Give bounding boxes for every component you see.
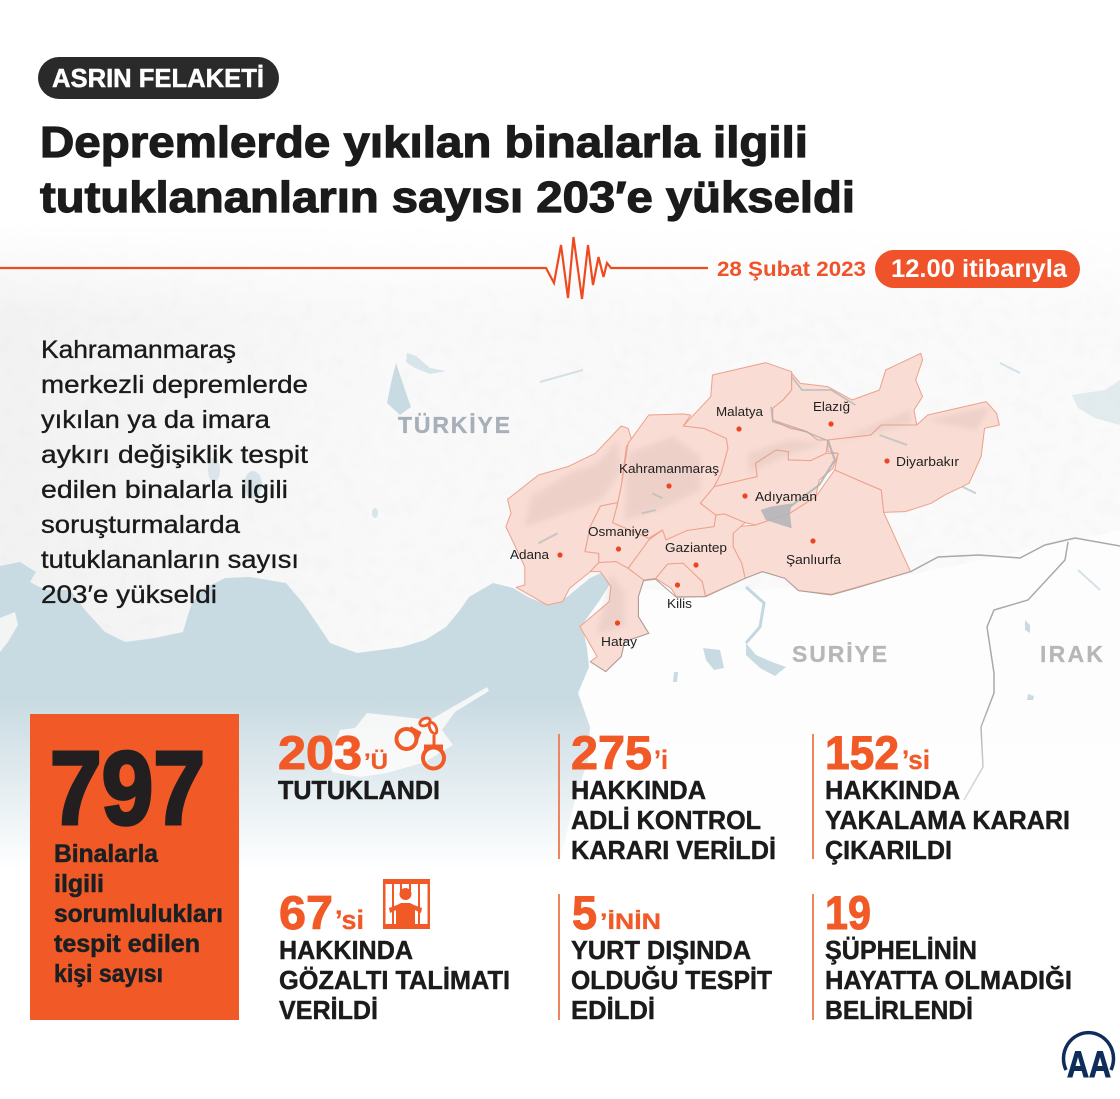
- province: Osmaniye: [585, 503, 663, 568]
- stat: 203: TUTUKLANDI: [278, 775, 440, 805]
- city labels: Hatay: [601, 634, 638, 649]
- stat: 203: ’Ü: [364, 749, 388, 774]
- province: Sanliurfa: [733, 470, 910, 594]
- country label: Irak: IRAK: [1040, 641, 1103, 667]
- caption: tespit edilen: [54, 930, 200, 958]
- stat: 275: HAKKINDA: [571, 775, 706, 805]
- stat: 19: BELİRLENDİ: [825, 995, 973, 1025]
- city labels: Diyarbakır: [896, 454, 960, 469]
- city labels: Osmaniye: [588, 524, 649, 539]
- divider: [812, 734, 814, 859]
- province: Hatay: [580, 562, 649, 672]
- stat: 5: 5: [572, 886, 597, 939]
- city labels: Adana: [510, 547, 550, 562]
- stat: 67: [279, 879, 510, 1025]
- province: Gaziantep: [628, 514, 745, 596]
- stat: 152: ’si: [902, 745, 930, 775]
- title: tutuklananların sayısı 203′e yükseldi: [40, 173, 855, 222]
- Aegean islands: [0, 612, 18, 652]
- stat: 275: 275: [571, 726, 652, 779]
- caption: ilgili: [54, 870, 104, 898]
- time pill: 12.00 itibarıyla: [891, 255, 1068, 283]
- caption: Binalarla: [54, 840, 159, 868]
- divider: [558, 734, 560, 859]
- title: [40, 118, 855, 222]
- intro text: merkezli depremlerde: [41, 371, 308, 399]
- stat: 5: EDİLDİ: [571, 995, 655, 1025]
- big number: 797: [50, 731, 205, 847]
- stat: 5: [571, 886, 772, 1025]
- province: Adiyaman: [700, 450, 838, 525]
- stat: 152: YAKALAMA KARARI: [825, 805, 1070, 835]
- time pill: [875, 250, 1080, 288]
- stat: 275: ’i: [654, 745, 668, 775]
- province: Adana: [506, 426, 632, 605]
- panel: 797 total: [30, 714, 239, 1020]
- stat: 19: HAYATTA OLMADIĞI: [825, 965, 1072, 995]
- intro text: [41, 336, 308, 609]
- icon: handcuffs: [396, 717, 444, 768]
- stat: 275: KARARI VERİLDİ: [571, 835, 776, 865]
- seismic line: [0, 237, 708, 299]
- province: Diyarbakir: [828, 402, 999, 512]
- divider: [558, 894, 560, 1020]
- province: Malatya: [683, 363, 828, 487]
- stat: 275: ADLİ KONTROL: [571, 805, 761, 835]
- stat: 19: [825, 886, 1072, 1025]
- intro text: tutuklananların sayısı: [41, 546, 299, 574]
- city labels: Malatya: [716, 404, 764, 419]
- city labels: Kahramanmaraş: [619, 461, 720, 476]
- stat: 67: VERİLDİ: [279, 995, 378, 1025]
- Cyprus: [330, 687, 489, 777]
- stat: 5: ’İNİN: [600, 909, 661, 934]
- lakes and rivers: [208, 353, 1120, 700]
- stat: 152: [825, 726, 1070, 865]
- stat: 203: 203: [278, 726, 362, 779]
- stat: 5: OLDUĞU TESPİT: [571, 965, 772, 995]
- date: 28 Şubat 2023: [717, 258, 866, 281]
- stat: 67: ’si: [335, 905, 364, 935]
- intro text: edilen binalarla ilgili: [41, 476, 288, 504]
- logo: Anadolu Agency: [1064, 1033, 1114, 1085]
- intro text: soruşturmalarda: [41, 511, 240, 539]
- provinces map: [506, 353, 999, 672]
- intro text: 203′e yükseldi: [41, 581, 217, 609]
- intro text: Kahramanmaraş: [41, 336, 236, 364]
- caption: [54, 840, 223, 988]
- city labels: Adıyaman: [755, 489, 817, 504]
- city labels: Şanlıurfa: [786, 552, 842, 567]
- intro text: aykırı değişiklik tespit: [41, 441, 308, 469]
- caption: sorumlulukları: [54, 900, 223, 928]
- stat: 67: HAKKINDA: [279, 935, 413, 965]
- province: Kahramanmaras: [613, 414, 728, 540]
- divider: [812, 894, 814, 1020]
- tag: Asrın Felaketi: [38, 57, 279, 99]
- stat: 152: HAKKINDA: [825, 775, 960, 805]
- stat: 67: GÖZALTI TALİMATI: [279, 965, 510, 995]
- province: Kilis: [656, 563, 706, 597]
- stat: 67: 67: [279, 886, 333, 939]
- icon: person behind bars: [383, 879, 430, 929]
- stat: 275: [571, 726, 776, 865]
- logo: Anadolu Agency: AA: [1067, 1044, 1111, 1085]
- Syria and Iraq borders: [910, 538, 1120, 800]
- city labels: [510, 399, 960, 649]
- stat: 152: 152: [825, 726, 899, 779]
- tag: Asrın Felaketi: ASRIN FELAKETİ: [52, 63, 264, 93]
- stat: 19: 19: [825, 886, 871, 939]
- country label: Suriye: SURİYE: [792, 641, 887, 667]
- intro text: yıkılan ya da imara: [41, 406, 270, 434]
- stat: 5: YURT DIŞINDA: [571, 935, 751, 965]
- caption: kişi sayısı: [54, 960, 163, 988]
- terrain shading and dams: [525, 377, 990, 672]
- city labels: Gaziantep: [665, 540, 727, 555]
- city dots: [557, 421, 890, 626]
- city labels: Kilis: [667, 596, 693, 611]
- stat: 152: ÇIKARILDI: [825, 835, 952, 865]
- title: Depremlerde yıkılan binalarla ilgili: [40, 118, 808, 167]
- country label: Türkiye: TÜRKİYE: [398, 412, 510, 438]
- stat: 203: [278, 717, 444, 805]
- province: Elazig: [773, 353, 923, 440]
- stat: 19: ŞÜPHELİNİN: [825, 935, 977, 965]
- city labels: Elazığ: [813, 399, 850, 414]
- sea: [0, 562, 611, 900]
